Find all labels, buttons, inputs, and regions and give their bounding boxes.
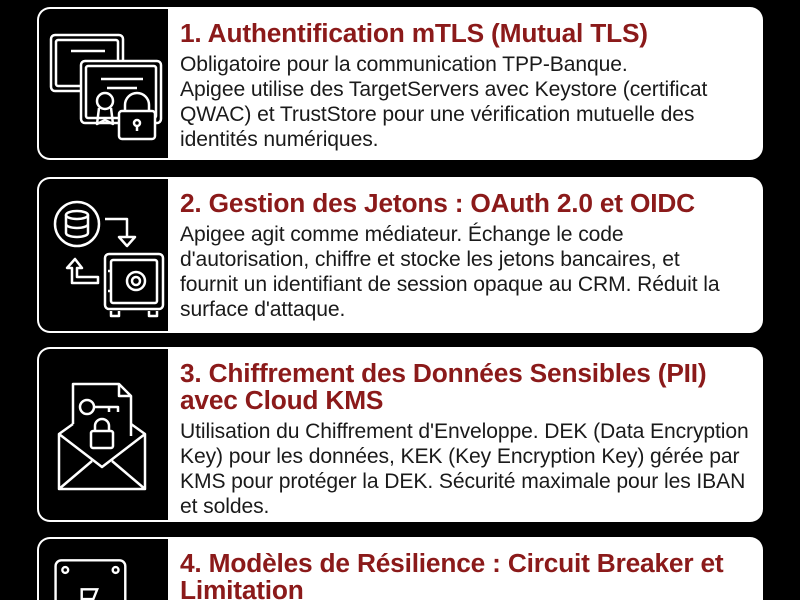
panel: KMS [37, 347, 763, 522]
icon: circuit breaker [39, 539, 168, 600]
heading: 2. Gestion des Jetons : OAuth 2.0 et OIDC [180, 188, 695, 218]
heading [180, 548, 724, 600]
body: surface d'attaque. [180, 298, 345, 321]
icon: certificates with lock [39, 9, 168, 158]
icon: envelope with key and lock [39, 349, 168, 520]
body [180, 420, 749, 518]
text block [180, 358, 749, 518]
panel: tokens [37, 177, 763, 333]
body: Obligatoire pour la communication TPP-Banque. [180, 53, 628, 76]
text block [180, 18, 708, 151]
body: et soldes. [180, 495, 269, 518]
heading: avec Cloud KMS [180, 385, 383, 415]
body: Key) pour les données, KEK (Key Encryption Key) gérée par [180, 445, 739, 468]
body: fournit un identifiant de session opaque au CRM. Réduit la [180, 273, 719, 296]
heading: 4. Modèles de Résilience : Circuit Breaker et [180, 548, 723, 578]
body: d'autorisation, chiffre et stocke les jetons bancaires, et [180, 248, 680, 271]
body: KMS pour protéger la DEK. Sécurité maximale pour les IBAN [180, 470, 745, 493]
body [180, 222, 720, 321]
body [180, 53, 708, 151]
heading [180, 358, 706, 415]
heading: 1. Authentification mTLS (Mutual TLS) [180, 18, 648, 48]
text block [180, 188, 720, 321]
panel: mTLS [37, 7, 763, 160]
text block [180, 548, 724, 600]
body: identités numériques. [180, 128, 378, 151]
body: Apigee utilise des TargetServers avec Keystore (certificat [180, 78, 707, 101]
icon: database and safe [39, 179, 168, 331]
body: Utilisation du Chiffrement d'Enveloppe. DEK (Data Encryption [180, 420, 749, 443]
body: QWAC) et TrustStore pour une vérification mutuelle des [180, 103, 694, 126]
body: Apigee agit comme médiateur. Échange le code [180, 223, 624, 246]
heading: 3. Chiffrement des Données Sensibles (PII) [180, 358, 706, 388]
panel: resilience [37, 537, 763, 600]
